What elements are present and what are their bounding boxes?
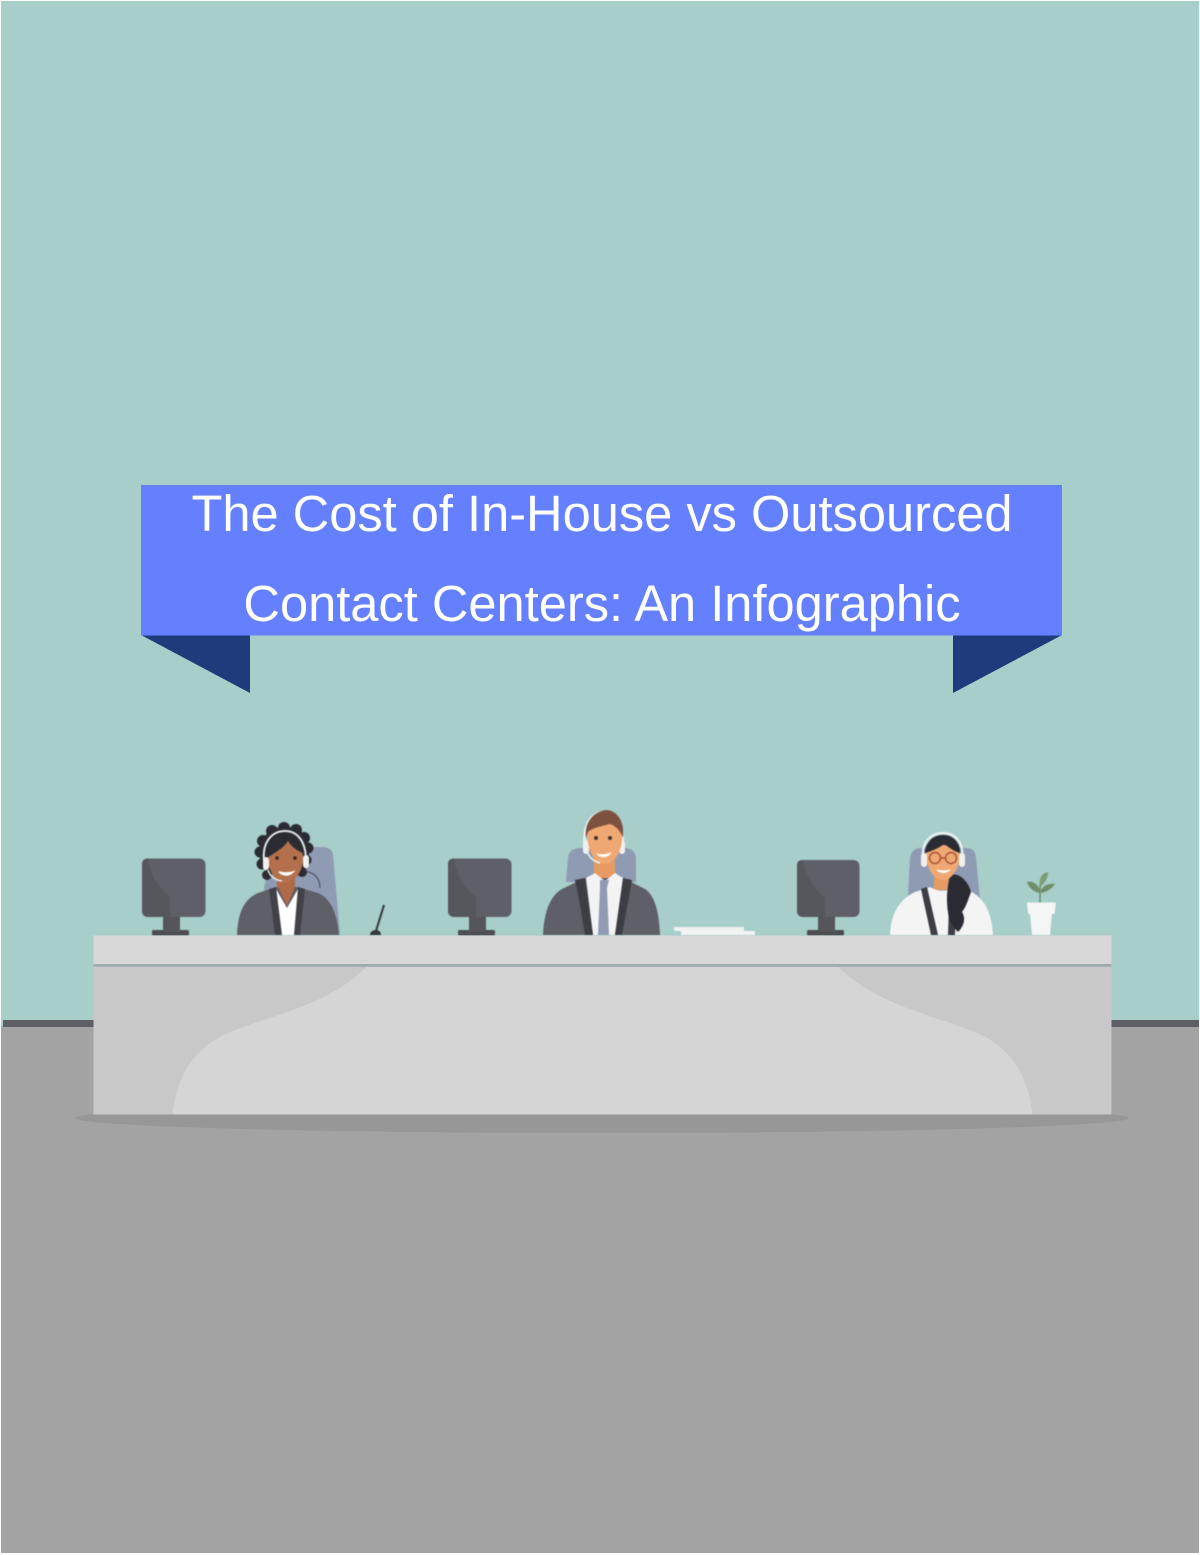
desk top [94, 936, 1112, 964]
right ribbon tail [953, 635, 1062, 693]
hair back [926, 835, 960, 858]
pen [370, 905, 384, 935]
eyes and smile [594, 836, 598, 840]
agent centre: man in suit [543, 810, 660, 935]
desk top edge [94, 964, 1112, 967]
desk front [94, 966, 1112, 1114]
eyes and smile [275, 856, 279, 860]
left ribbon tail [141, 635, 250, 693]
glasses [930, 852, 956, 864]
potted plant [1027, 872, 1056, 935]
jacket [237, 887, 339, 935]
hair [586, 810, 623, 838]
floor [1, 1026, 1199, 1553]
neck [277, 872, 295, 908]
desk shadow [75, 1103, 1129, 1133]
monitor right [797, 860, 860, 936]
desk front curve panel [172, 966, 1032, 1114]
coat [890, 887, 993, 935]
chair [908, 848, 980, 900]
shirt [586, 873, 623, 935]
neck [934, 875, 951, 890]
smile [937, 870, 950, 872]
agent right: woman with glasses [890, 833, 993, 935]
fringe [267, 835, 303, 858]
microphone [587, 852, 600, 863]
right strap [948, 905, 956, 935]
neck opening [278, 887, 295, 906]
face [926, 845, 960, 880]
curly hair [254, 822, 314, 880]
title text: Contact Centers: An Infographic [243, 575, 961, 632]
lapels [269, 887, 305, 935]
reception desk [94, 936, 1112, 1114]
headset [923, 833, 962, 858]
hair front [925, 836, 960, 853]
banner panel [141, 485, 1062, 636]
agent left: woman with curly hair [237, 822, 340, 935]
wall background [1, 1, 1199, 1026]
ponytail [947, 874, 971, 932]
monitor left [142, 858, 206, 936]
tie [598, 880, 609, 935]
jacket [543, 878, 660, 935]
lapels [575, 878, 632, 935]
face [268, 841, 303, 883]
monitor centre [448, 858, 512, 936]
blouse [276, 889, 298, 935]
neck [594, 858, 615, 888]
baseboard [3, 1020, 1199, 1027]
chair [264, 847, 340, 935]
headset [264, 831, 306, 861]
headset band [584, 812, 623, 850]
papers [674, 927, 755, 935]
face [587, 821, 622, 864]
left strap [921, 887, 938, 935]
headset cable [305, 871, 320, 888]
title text: The Cost of In-House vs Outsourced [191, 485, 1013, 542]
title banner [141, 485, 1062, 693]
chair [566, 848, 636, 882]
